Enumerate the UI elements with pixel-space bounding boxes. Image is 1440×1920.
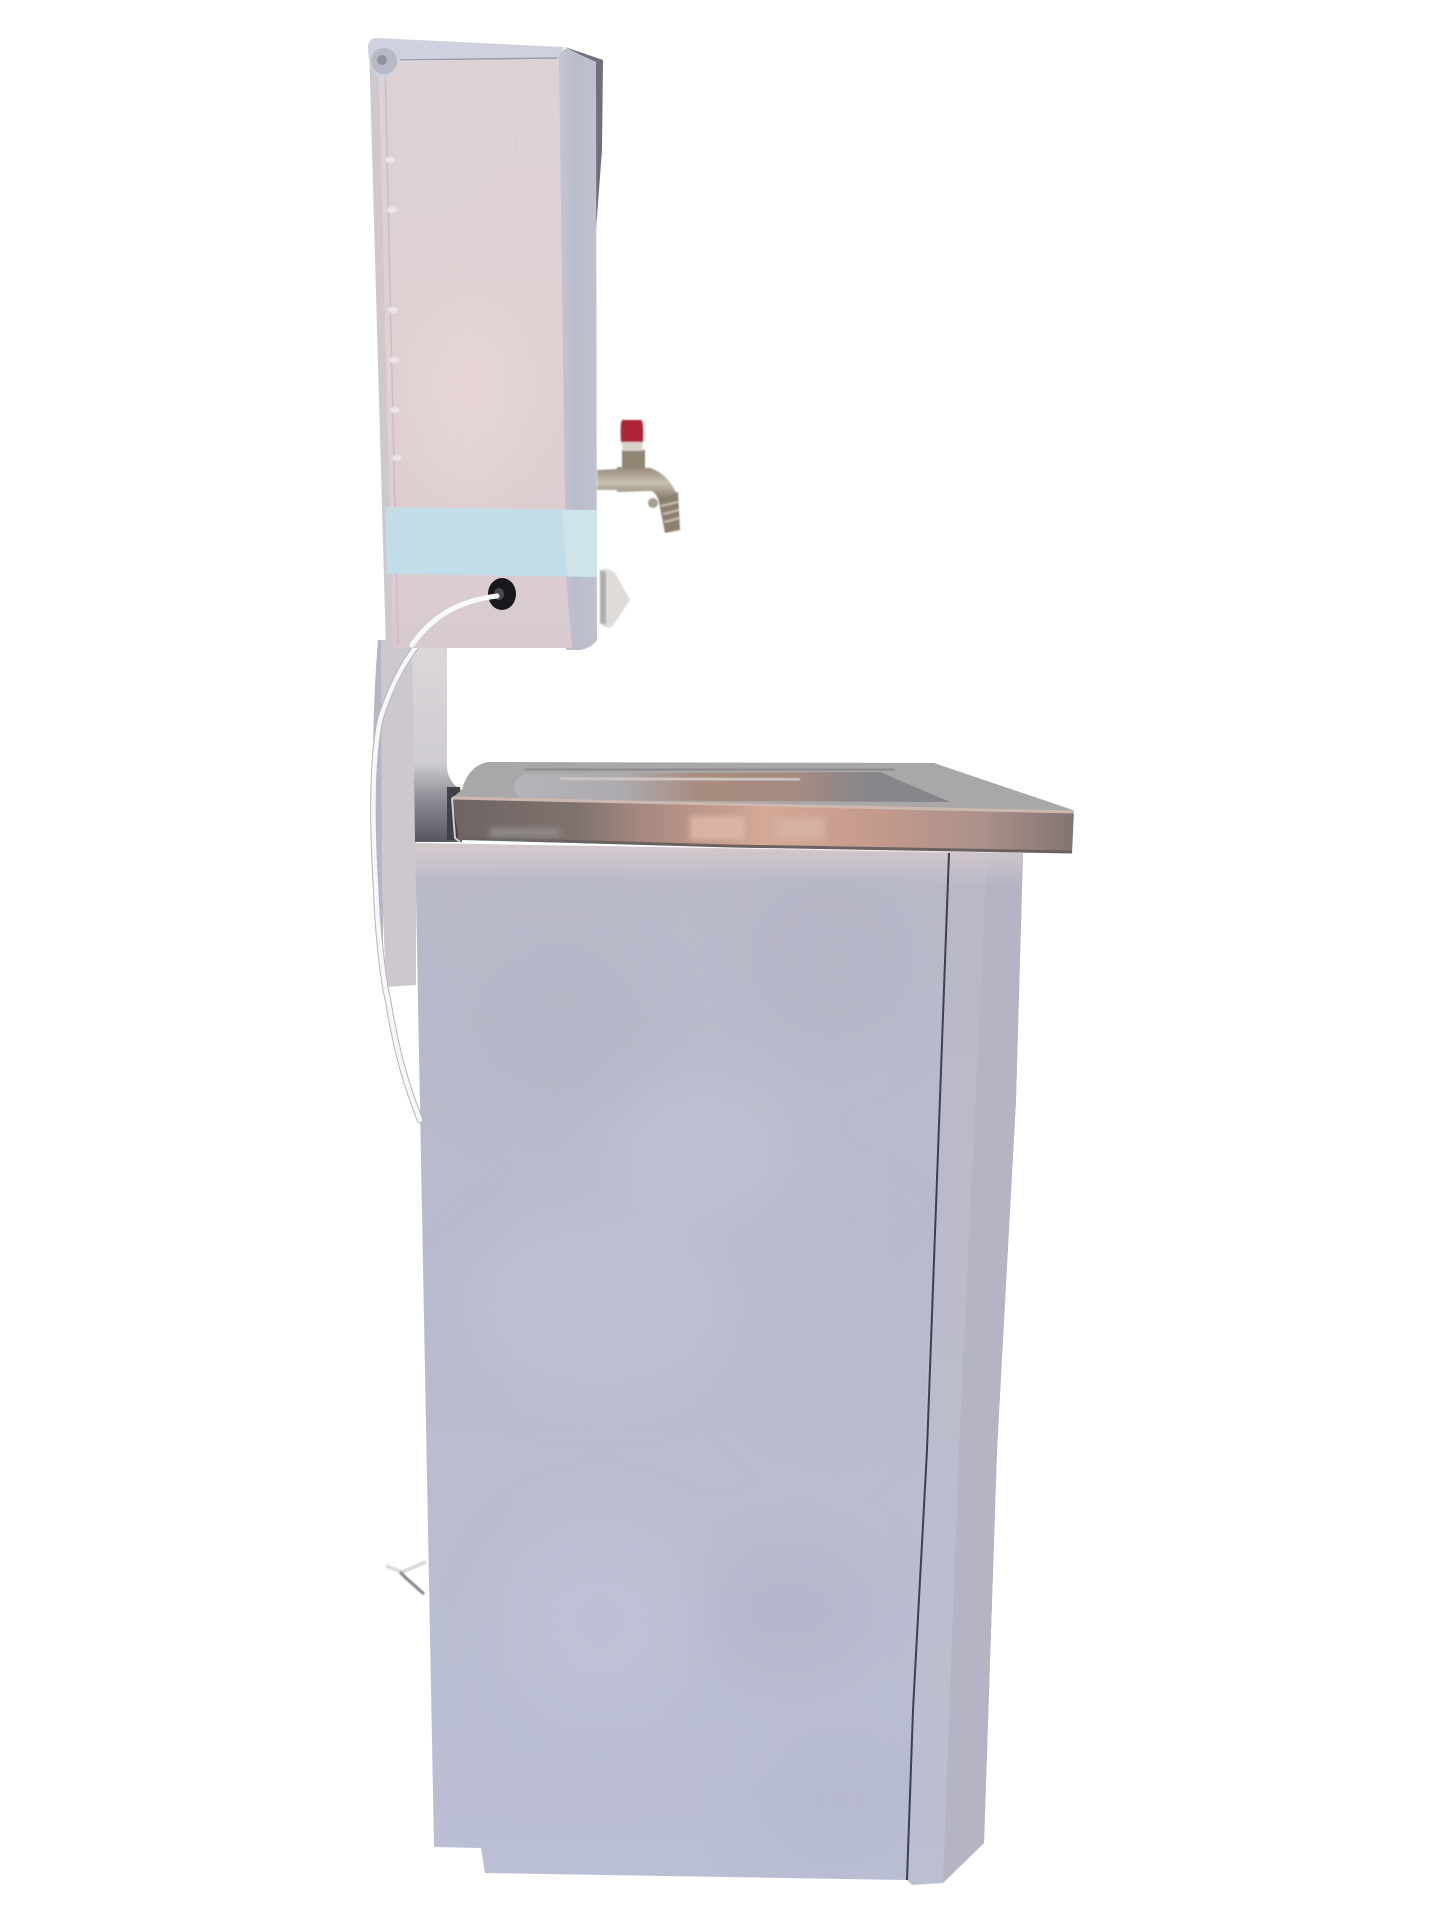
tank left folded seam <box>369 38 393 650</box>
white plug fitting <box>600 569 630 627</box>
faucet <box>597 420 680 533</box>
cabinet right side panel <box>907 852 1023 1885</box>
post outer strip <box>373 640 388 987</box>
faucet stem <box>622 450 645 472</box>
warm shadow under rim <box>415 843 1023 885</box>
faucet nub <box>648 498 658 508</box>
illustration: hand-wash sink unit, side view <box>368 38 1074 1885</box>
grommet <box>488 578 516 610</box>
sink basin <box>514 772 950 802</box>
sink top <box>452 762 1074 853</box>
small cable clip <box>386 1562 426 1594</box>
cabinet side fold shading <box>943 853 1023 1883</box>
post front section <box>412 645 462 842</box>
rivet bumps <box>385 157 402 461</box>
cable entering grommet <box>412 596 497 645</box>
cabinet door <box>415 843 949 1880</box>
bracket shadow <box>447 787 460 840</box>
tank front face <box>377 58 572 648</box>
wall tank box <box>368 38 603 650</box>
rim bottom shadow <box>458 838 1072 852</box>
power cable <box>373 596 497 1120</box>
post back section <box>381 640 416 987</box>
rim top highlight <box>452 798 1074 812</box>
tank dark side edge <box>565 47 603 243</box>
cabinet body <box>415 843 1023 1885</box>
faucet pipe <box>597 467 676 502</box>
corner bolt <box>371 48 397 74</box>
sink deck <box>453 762 1073 815</box>
rear mounting post <box>373 640 462 987</box>
door seam <box>907 853 949 1880</box>
rim highlights <box>490 816 825 840</box>
top strip <box>368 38 564 78</box>
blue tape <box>385 507 597 577</box>
faucet spout <box>658 492 680 533</box>
paint blotches <box>450 870 920 1860</box>
sink front rim <box>452 797 1074 853</box>
rim left bracket <box>452 798 460 842</box>
red handle cap <box>621 420 643 442</box>
tank side panel <box>557 48 597 650</box>
